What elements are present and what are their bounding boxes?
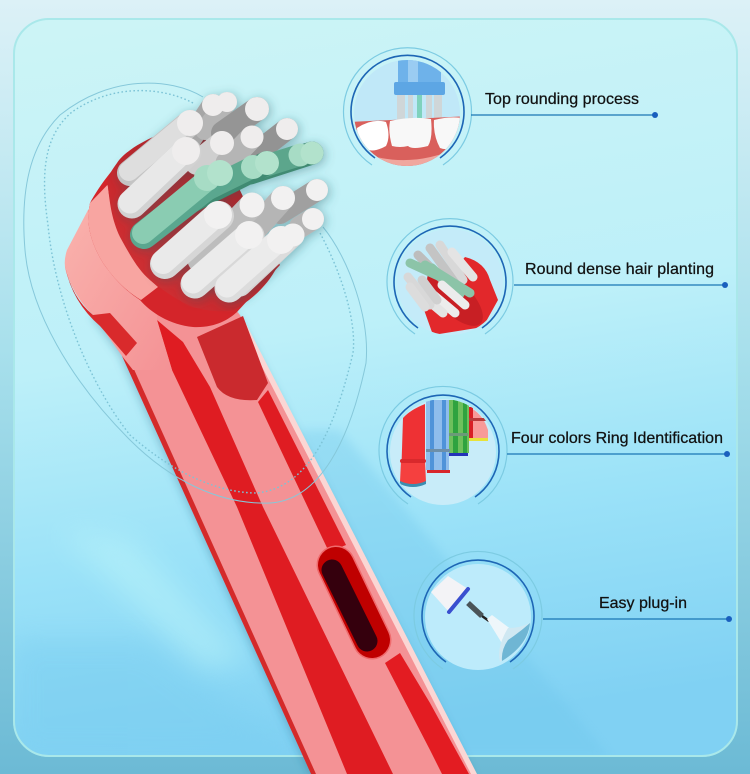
right red stripe lower xyxy=(385,653,469,774)
label: Easy plug-in xyxy=(599,595,687,612)
decorative orbit rings xyxy=(24,83,367,503)
toothbrush handle xyxy=(93,240,477,774)
slot xyxy=(332,565,372,641)
front tuft tips xyxy=(204,179,328,254)
back tufts xyxy=(129,102,287,204)
icon rings xyxy=(387,219,513,335)
right red stripe upper xyxy=(258,390,346,552)
icon rings xyxy=(414,551,542,670)
label: Top rounding process xyxy=(485,91,639,108)
leader line xyxy=(471,114,655,116)
icon: four colored brush necks xyxy=(400,400,488,487)
leader line xyxy=(543,618,729,620)
leader line xyxy=(507,453,727,455)
icon: brush head xyxy=(408,245,498,335)
right white edge xyxy=(238,318,477,774)
feature 1: top rounding process xyxy=(344,48,658,170)
handle body xyxy=(93,240,474,774)
left red rim xyxy=(122,356,316,774)
feature 4: easy plug-in xyxy=(414,551,732,670)
back tuft tips xyxy=(172,92,298,165)
feature 2: round dense hair planting xyxy=(387,219,728,335)
head skirt xyxy=(88,130,280,327)
icon rings xyxy=(344,48,472,166)
icon: plug-in cap and base xyxy=(431,576,530,662)
feature 3: four colors ring identification xyxy=(379,386,730,505)
bristle tufts xyxy=(129,92,328,288)
central red stripe xyxy=(157,320,393,774)
label: Four colors Ring Identification xyxy=(511,430,723,447)
green tufts xyxy=(143,142,324,235)
label: Round dense hair planting xyxy=(525,261,714,278)
toothbrush head xyxy=(65,92,328,370)
dark wedge on neck xyxy=(197,316,268,400)
leader line xyxy=(514,284,725,286)
head face disc xyxy=(107,132,277,311)
front tufts xyxy=(163,190,317,288)
neck xyxy=(65,190,172,370)
icon rings xyxy=(379,386,507,505)
icon: brush on teeth xyxy=(354,60,460,166)
